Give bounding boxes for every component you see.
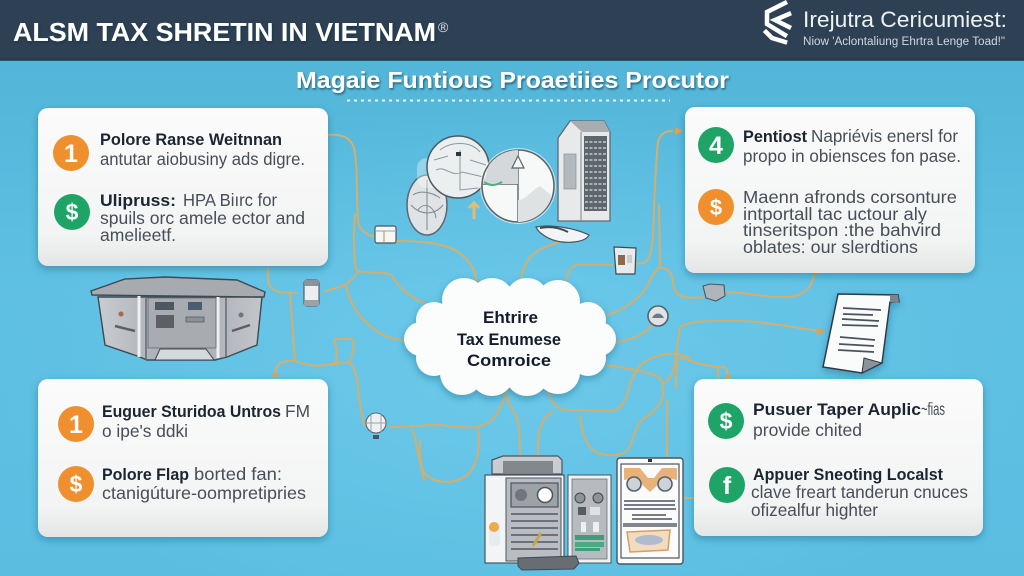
icon: green letter f [709,467,745,503]
text: item one [102,401,310,441]
icon: orange number 1 [53,135,89,171]
text: item two: ofizealfur highter [751,500,878,520]
icon: orange number 1: 1 [64,140,78,168]
icon: tablet [617,458,683,564]
icon: small jar [304,280,319,306]
icon: split disc [480,148,556,224]
text: item one: propo in obiensces fon pase. [743,146,961,166]
text: item two: amelieetf. [100,225,176,245]
icon: orange dollar [698,189,734,225]
icon: orange dollar [58,466,94,502]
connector network [268,131,820,498]
icon: printer machine [485,456,564,563]
text: item two [100,190,305,245]
icon: green dollar [54,194,90,230]
icon: green dollar: $ [720,408,733,434]
text: item two: Polore Flap [102,465,189,484]
icon: green number 4 [698,127,734,163]
icon: orange dollar: $ [710,195,722,220]
text: item one: Euguer Sturidoa Untros [102,402,281,421]
icon: balloon [366,413,386,439]
wire arrowheads [272,127,826,380]
text: item two: intportall tac uctour aly [743,204,927,224]
text: item two: oblates: our slerdtions [743,237,918,257]
dotted rule [347,100,670,102]
cloud label: Tax Enumese [457,330,561,349]
brand name: Irejutra Cericumiest: [803,7,1007,32]
text: item two: tinseritspon :the bahvird [743,220,941,240]
cloud label: Ehtrire [483,308,538,327]
text: item two: ctanigúture-oompretipries [102,483,306,503]
icon: left disc [407,175,447,235]
icon: orange number 1 [58,406,94,442]
title: ALSM TAX SHRETIN IN VIETNAM [13,17,436,47]
text: item two [751,465,968,520]
text: item two: borted fan: [194,464,282,484]
text: item one: Pentiost [743,127,807,146]
text: item one: Pusuer Taper Auplic [753,400,921,419]
brand tagline: Niow 'Aclontaliung Ehrtra Lenge Toad!" [803,36,1005,48]
icon: orange dollar: $ [70,471,83,497]
icon: green dollar: $ [66,199,79,225]
text: item one: o ipe's ddki [102,421,188,441]
text: item one: ~fias [921,399,945,419]
icon: logo [766,3,789,42]
subtitle: Magaie Funtious Proaetiies Procutor [296,67,729,93]
icon: steel machine left [91,277,265,360]
text: item one: provide chited [753,420,862,440]
icon: small up arrow [469,203,479,219]
icon: small cabinet [614,247,636,274]
icon: top disc [417,136,489,198]
icon: green dollar [708,403,744,439]
panel: bottom left [38,379,328,537]
header bar [0,0,1024,61]
icon: flat plate [536,226,589,242]
text: item two: Appuer Sneoting Localst [753,465,943,484]
registered mark: ® [438,19,449,35]
text: item two: HPA Biırc for [183,190,277,210]
cloud label: Comroice [467,351,551,370]
icon: base tray [518,556,579,570]
icon: green number 4: 4 [709,132,723,160]
text: item two: clave freart tanderun cnuces [751,482,968,502]
central cloud [404,278,616,396]
text: item two [102,464,306,503]
text: item two: Ulipruss: [100,191,176,210]
text: item one [100,130,305,169]
icon: small box [375,226,396,243]
text: item one: Napriévis enersl for [811,126,958,146]
text: item one: FM [285,401,310,421]
text: item one [753,399,945,440]
panel: bottom right [694,379,983,536]
text: item one [743,126,961,166]
icon: server tower [558,121,610,221]
icon: document [823,294,899,373]
icon: green letter f: f [723,472,732,500]
icon: control panel [568,475,611,563]
icon: round badge [648,306,668,326]
panel: top left [38,108,328,266]
panel: top right [685,107,975,273]
text: item two: Maenn afronds corsonture [743,187,957,207]
text: item one: antutar aiobusiny ads digre. [100,149,305,169]
icon: orange number 1: 1 [69,411,83,439]
text: item one: Polore Ranse Weitnnan [100,130,282,149]
text: item two [743,187,957,257]
text: item two: spuils orc amele ector and [100,208,305,228]
icon: crystal [703,284,725,301]
cloud label [457,308,561,370]
